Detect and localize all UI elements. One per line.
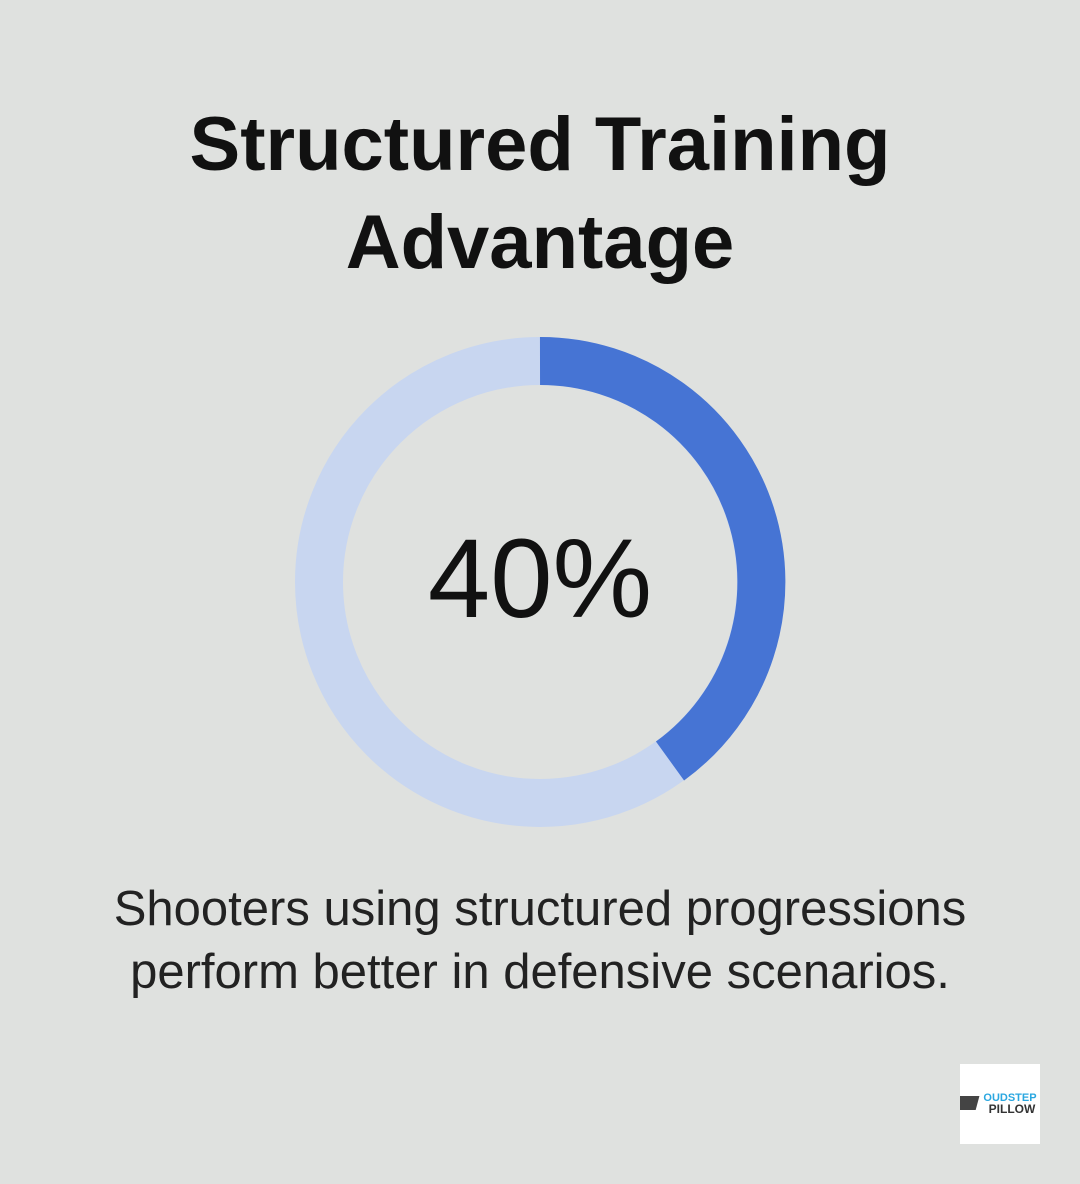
logo: OUDSTEP: [983, 1092, 1037, 1104]
logo: [960, 1064, 1040, 1144]
title: [190, 102, 890, 285]
donut value arc 40%: [540, 361, 761, 761]
title: Structured Training: [190, 102, 890, 187]
description text: Shooters using structured progressions: [114, 882, 966, 936]
description text: perform better in defensive scenarios.: [130, 945, 950, 999]
center value: 40%: [428, 516, 652, 641]
logo: PILLOW: [989, 1102, 1036, 1116]
title: Advantage: [346, 200, 734, 285]
donut track: [319, 361, 761, 803]
description text: [114, 882, 966, 999]
